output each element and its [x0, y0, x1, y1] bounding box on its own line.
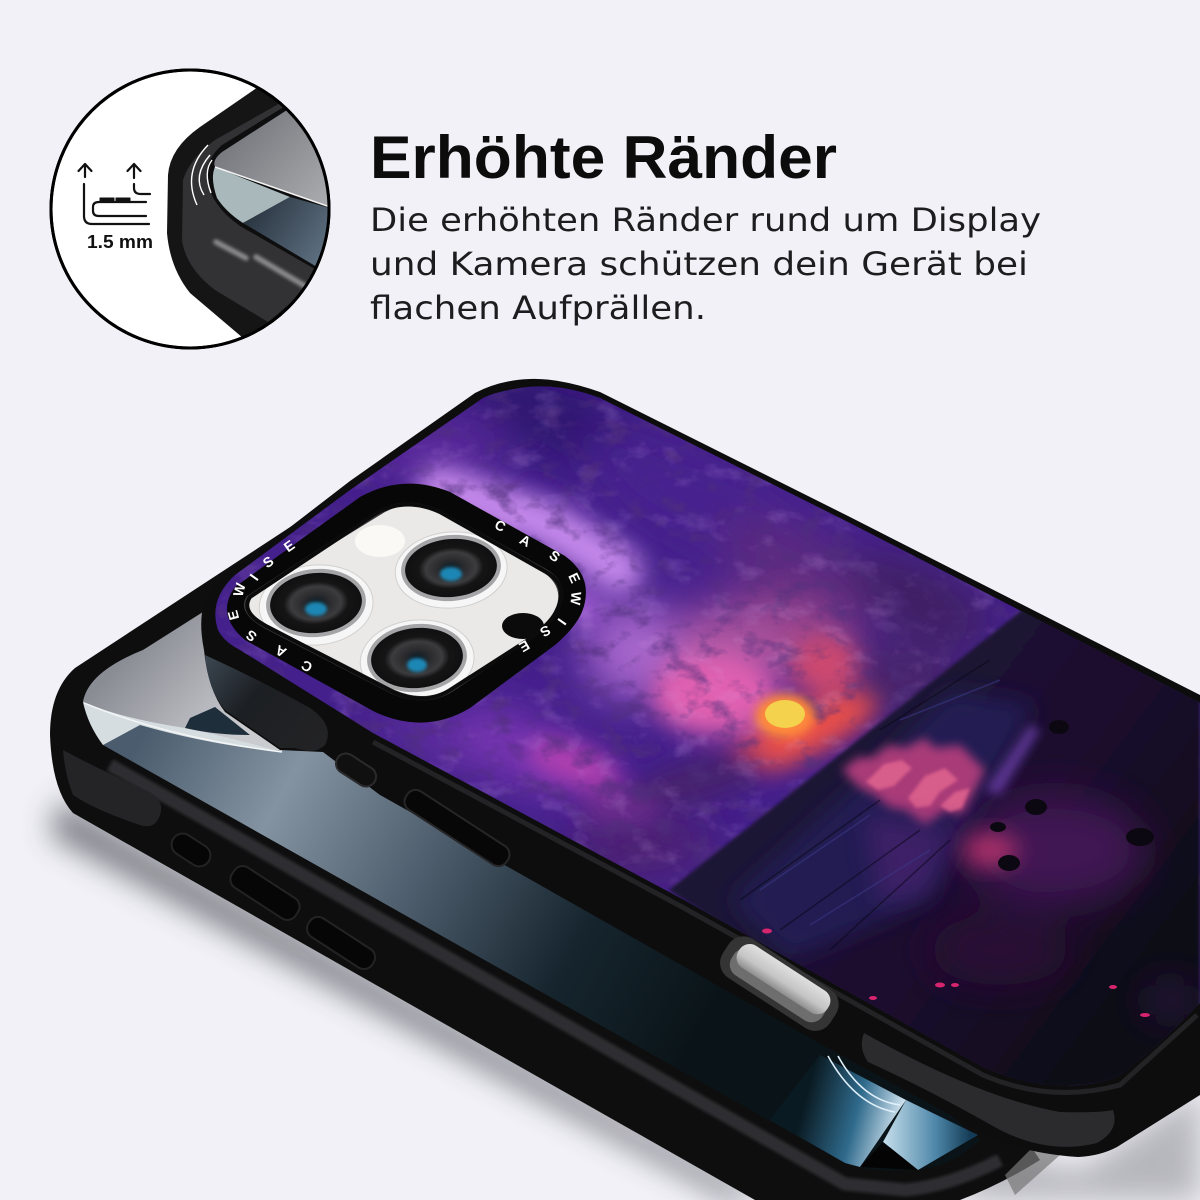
brand text: CASEWISE: I — [554, 616, 570, 628]
description text — [370, 201, 1041, 327]
camera bump — [224, 484, 586, 723]
description text: und Kamera schützen dein Gerät bei — [370, 245, 1028, 283]
sky texture — [224, 391, 1200, 883]
screen highlight grey — [83, 598, 300, 751]
brand text: CASEWISE: C — [298, 657, 315, 676]
description text: flachen Aufprällen. — [370, 289, 706, 327]
paint streaks — [740, 660, 1000, 950]
brand text: CASEWISE: S — [260, 553, 277, 571]
lower phone rim ridge — [110, 765, 1000, 1190]
lower phone bumper — [63, 750, 161, 826]
brand text: CASEWISE: S — [546, 547, 563, 565]
dark paint clumps — [990, 720, 1154, 871]
lens 3 — [360, 620, 474, 696]
description text: Die erhöhten Ränder rund um Display — [370, 201, 1041, 239]
screen reflection — [214, 110, 330, 207]
pink flecks — [762, 928, 1150, 1017]
lit reflection crest — [842, 738, 985, 826]
lower phone screen — [83, 560, 980, 1170]
upper phone grey bumper — [205, 655, 328, 751]
brand text: CASEWISE: E — [281, 537, 298, 555]
brand text: CASEWISE: S — [537, 622, 554, 641]
metal charging button — [713, 929, 846, 1038]
rim highlight — [373, 742, 1197, 1093]
camera plate — [249, 506, 558, 696]
microphone hole — [502, 613, 544, 639]
artwork: purple sunset painting — [215, 386, 1200, 1086]
lower phone buttons — [167, 829, 379, 973]
flash — [355, 525, 405, 557]
right dark purple patches — [930, 795, 1198, 1018]
ring inner black rim — [247, 504, 561, 699]
brand text: CASEWISE: W — [230, 580, 249, 598]
phone shadows — [50, 800, 1200, 1200]
brand text: CASEWISE: A — [517, 531, 534, 550]
icon label: 1.5 mm — [87, 232, 153, 252]
brand text: CASEWISE: A — [272, 642, 289, 661]
lens 1 — [258, 564, 374, 646]
lens 2 — [394, 532, 508, 608]
reflection mass — [730, 690, 1036, 960]
brand text: CASEWISE: C — [492, 516, 509, 535]
lower phone case — [50, 478, 1060, 1200]
sun — [765, 700, 805, 728]
callout: raised edge detail circle — [51, 70, 330, 348]
corner reflection — [770, 1055, 906, 1167]
icon: raised edge diagram — [78, 164, 150, 224]
title: Erhöhte Ränder — [370, 124, 837, 191]
sky colour fields — [360, 342, 1005, 886]
dark notch — [185, 707, 250, 735]
phone corner closeup — [167, 88, 289, 336]
brand text: CASEWISE: E — [224, 609, 242, 622]
pink glow lower right — [962, 834, 1018, 866]
brand text: CASEWISE: E — [565, 570, 584, 586]
case metal glint — [1005, 1150, 1060, 1195]
lens glints — [305, 602, 327, 616]
camera ring — [227, 484, 586, 723]
brand text: CASEWISE: W — [567, 591, 585, 606]
brand text: CASEWISE: I — [246, 571, 262, 583]
purple crest edge — [985, 725, 1040, 795]
sea — [669, 600, 1200, 1100]
silent switch — [332, 750, 380, 790]
sun glow — [755, 694, 815, 738]
upper phone case — [201, 379, 1200, 1157]
side button — [401, 786, 513, 870]
brand text: CASEWISE: E — [516, 637, 533, 656]
brand text: CASEWISE — [224, 516, 585, 676]
reflection highlights — [866, 760, 970, 812]
brand text: CASEWISE: S — [243, 627, 260, 645]
pale screen reflection — [83, 702, 282, 752]
